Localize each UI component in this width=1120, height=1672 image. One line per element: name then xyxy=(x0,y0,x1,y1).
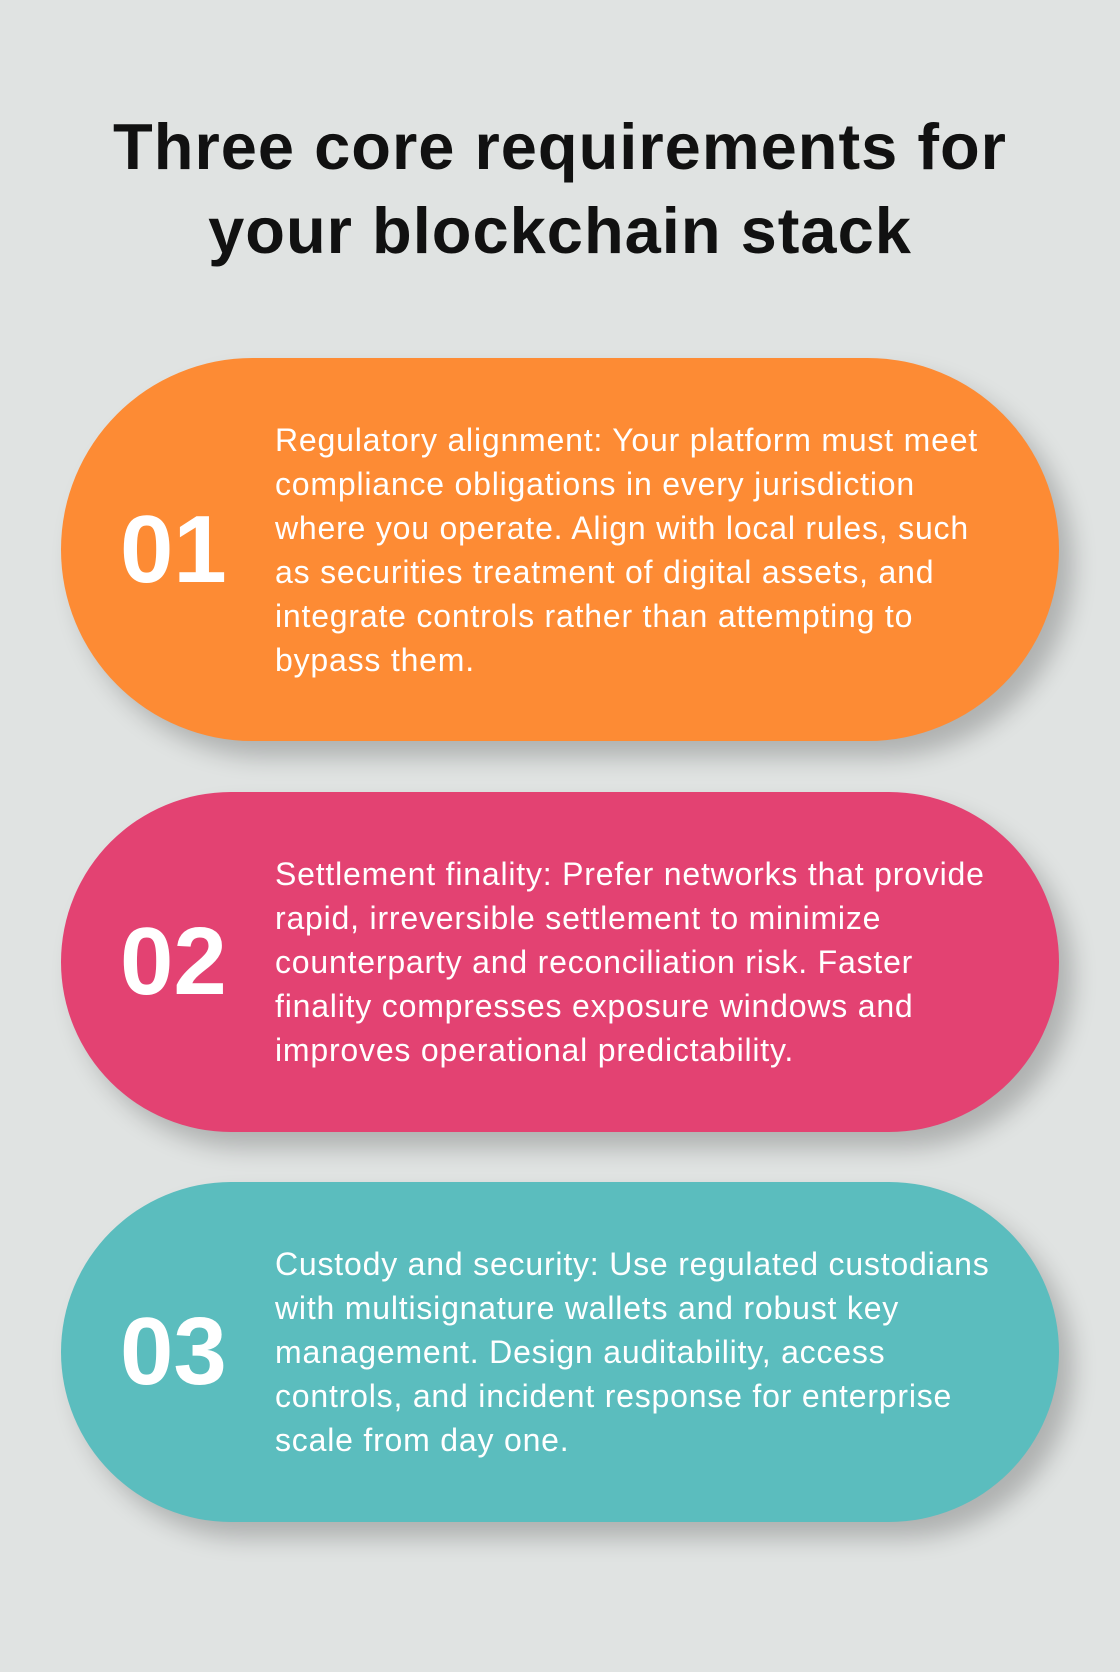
text: custody and security: scale from day one. xyxy=(275,1422,569,1458)
panel: 02 settlement finality xyxy=(61,792,1059,1132)
panel: 01 regulatory alignment xyxy=(61,358,1059,741)
text: custody and security: management. Design auditability, access xyxy=(275,1334,885,1370)
text: regulatory alignment: compliance obligations in every jurisdiction xyxy=(275,466,915,502)
text: regulatory alignment: as securities treatment of digital assets, and xyxy=(275,554,934,590)
text: settlement finality: finality compresses exposure windows and xyxy=(275,988,914,1024)
text: settlement finality: improves operational predictability. xyxy=(275,1032,794,1068)
text: custody and security: with multisignature wallets and robust key xyxy=(275,1290,899,1326)
number 03: 03 xyxy=(120,1298,227,1405)
number 02: 02 xyxy=(120,908,227,1015)
text: regulatory alignment: integrate controls rather than attempting to xyxy=(275,598,913,634)
text: settlement finality: Settlement finality: Prefer networks that provide xyxy=(275,856,985,892)
text: settlement finality xyxy=(275,856,985,1068)
number 01: 01 xyxy=(120,496,227,602)
text: custody and security xyxy=(275,1246,990,1458)
text: regulatory alignment: bypass them. xyxy=(275,642,475,678)
title xyxy=(113,110,1007,267)
title: your blockchain stack xyxy=(208,194,912,267)
panel: 03 custody and security xyxy=(61,1182,1059,1522)
text: regulatory alignment: where you operate. Align with local rules, such xyxy=(275,510,969,546)
text: custody and security: controls, and incident response for enterprise xyxy=(275,1378,952,1414)
text: settlement finality: rapid, irreversible settlement to minimize xyxy=(275,900,881,936)
text: settlement finality: counterparty and reconciliation risk. Faster xyxy=(275,944,913,980)
text: regulatory alignment xyxy=(275,422,978,678)
title: Three core requirements for xyxy=(113,110,1007,183)
text: regulatory alignment: Regulatory alignment: Your platform must meet xyxy=(275,422,978,458)
text: custody and security: Custody and security: Use regulated custodians xyxy=(275,1246,990,1282)
